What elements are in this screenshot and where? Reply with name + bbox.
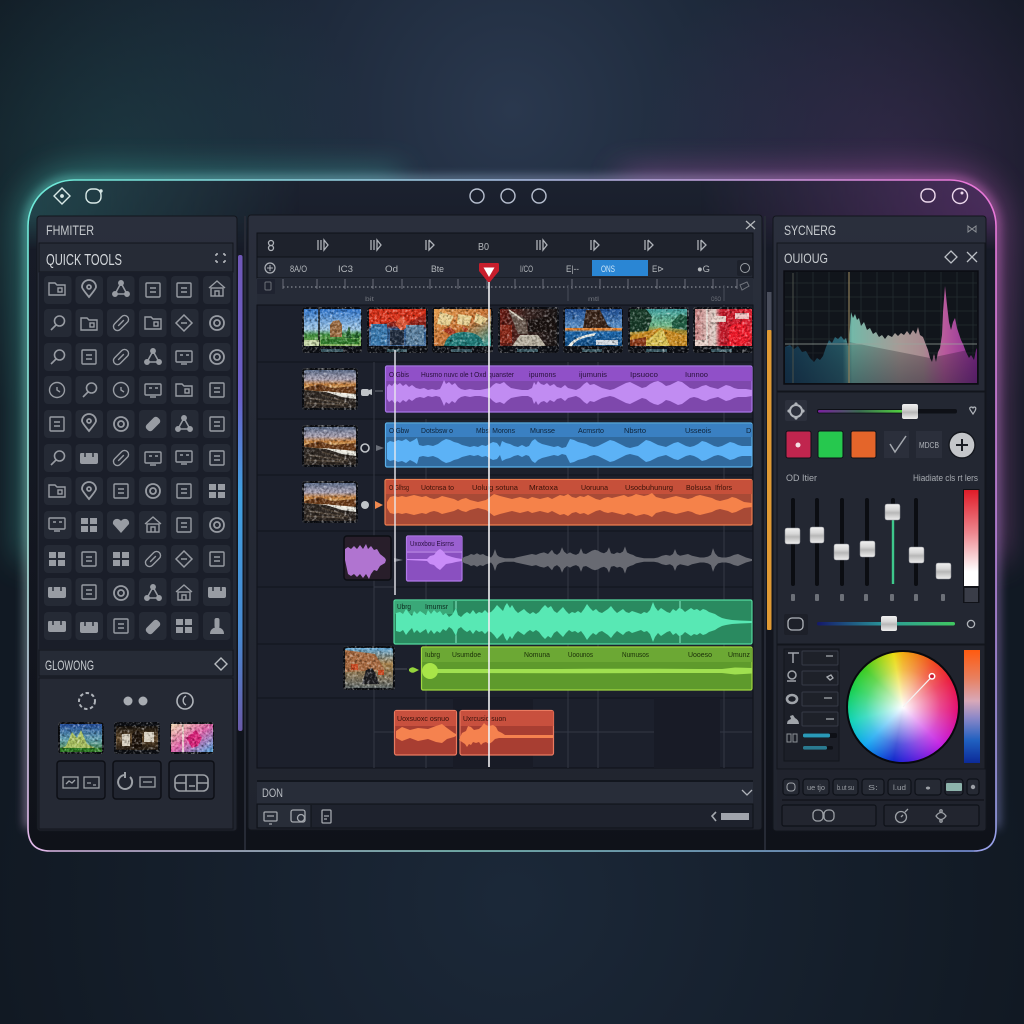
panel: left tools — [37, 216, 237, 831]
quick tools header: QUICK TOOLS — [46, 252, 122, 269]
gray audio waveform — [462, 546, 752, 574]
row 1 thumbnail — [302, 368, 358, 410]
lime audio clip: Usumdoe — [452, 650, 481, 659]
red audio clip one — [394, 710, 456, 755]
blue audio clip: Acmsrto — [578, 426, 604, 435]
colour wheel — [846, 650, 960, 764]
lime audio clip: Umunz — [728, 650, 750, 659]
secondary marker line — [394, 350, 396, 595]
track area — [257, 305, 753, 768]
purple short audio clip — [406, 536, 462, 581]
toggle button row: b.ut su — [837, 785, 854, 792]
controls section — [777, 392, 985, 644]
colour value fields — [784, 649, 839, 761]
transport row — [257, 233, 753, 257]
timecode row: ●G — [697, 264, 710, 275]
preset buttons — [57, 761, 214, 799]
close icon — [746, 221, 755, 229]
green audio clip: Ubrg — [397, 602, 411, 611]
left gradient scrollbar — [238, 255, 242, 731]
timecode row: I/CO — [520, 264, 533, 275]
panel: timeline — [248, 215, 762, 830]
transport row: B0 — [478, 241, 489, 253]
lime audio clip: Uoounos — [568, 650, 593, 659]
green audio clip: Imumsr — [425, 602, 448, 611]
title bar icons — [54, 188, 968, 204]
window frame — [28, 180, 996, 851]
mixer labels — [786, 473, 978, 484]
purple audio clip: Iunnoo — [685, 370, 708, 379]
colour wheel marker — [903, 672, 936, 707]
right panel heading — [784, 222, 976, 238]
orange audio clip: Mratoxa — [529, 483, 559, 492]
colour swatches — [786, 431, 975, 458]
track connector icons — [361, 389, 403, 562]
toggle button row: l.ud — [893, 785, 906, 792]
top slider row — [785, 400, 976, 421]
orange audio clip: Usocbuhunurg — [625, 483, 673, 492]
blue audio clip: Dotsbsw o — [421, 426, 453, 435]
lime audio clip: Iubrg — [425, 650, 440, 659]
glowing section header — [39, 650, 233, 676]
quick tools icon grid — [39, 272, 233, 649]
timecode row: E⊳ — [652, 264, 664, 275]
timecode row: Od — [385, 264, 398, 275]
red audio clip one: Uoxsuoxc osnuo — [397, 714, 449, 723]
colour swatches: MDCB — [919, 440, 939, 450]
purple audio clip: ipumons — [529, 370, 556, 379]
bottom action buttons — [782, 805, 979, 826]
bottom toolbar — [257, 804, 753, 828]
spectrum section: OUIOUG — [784, 250, 828, 266]
toggle button row: ● — [925, 785, 931, 792]
timecode row: 8A/O — [290, 264, 307, 275]
orange audio clip — [385, 480, 752, 525]
timecode row: IC3 — [338, 264, 353, 275]
purple audio clip: O Gbis — [389, 370, 409, 379]
blue audio clip: Nbsrto — [624, 426, 646, 435]
orange audio clip: Uoluig sotuna — [472, 483, 519, 492]
orange audio clip: Bolsusa — [686, 483, 712, 492]
orange audio clip: Uotcnsa to — [421, 483, 454, 492]
glowing section body — [39, 678, 233, 829]
timecode row — [257, 257, 753, 278]
blue audio clip: Mbsl Morons — [476, 426, 515, 435]
purple audio clip — [386, 366, 752, 412]
level meter — [963, 489, 980, 603]
selected time button — [592, 260, 648, 276]
lime audio clip — [422, 647, 752, 690]
toggle button row: S: — [868, 785, 878, 792]
bottom dock header: DON — [262, 786, 283, 800]
quick tools header — [39, 243, 233, 272]
green audio clip — [394, 600, 752, 644]
ruler: OSO — [711, 297, 721, 303]
blue audio clip: Usseois — [685, 426, 711, 435]
lime audio clip: Nomuna — [524, 650, 551, 659]
bottom slider row — [784, 614, 975, 635]
bottom dock header — [257, 781, 753, 804]
spectrum section — [777, 243, 985, 391]
small purple waveform thumbnail — [344, 536, 391, 580]
right vertical scrollbar — [767, 292, 772, 630]
ruler: bit — [365, 297, 374, 303]
orange audio clip: Ifrlors — [715, 483, 732, 492]
row 3 thumbnail — [302, 481, 358, 523]
row 2 thumbnail — [302, 425, 358, 467]
lime audio clip: Uooeso — [688, 650, 712, 659]
colour section — [777, 645, 985, 769]
glowing section header: GLOWONG — [45, 657, 94, 673]
blue audio clip: Munsse — [530, 426, 555, 435]
purple audio clip: Ipsuoco — [630, 370, 658, 379]
video clip thumbnails — [302, 307, 753, 353]
panel: right inspector — [773, 216, 986, 831]
red audio clip two: Uxrcusio suon — [463, 714, 506, 723]
orange audio clip: Uoruuna — [581, 483, 609, 492]
blue audio clip — [386, 423, 752, 467]
ruler: mtl — [588, 297, 599, 303]
purple audio clip: Husmo nuvc ole t Oxd quanster — [421, 370, 514, 379]
mixer labels: Hiadiate cls rt lers — [913, 473, 978, 484]
toggle button row — [777, 770, 985, 830]
preset thumbnails — [58, 722, 214, 754]
left panel heading: FHMITER — [46, 222, 94, 238]
toggle button row: ue tjo — [807, 785, 825, 792]
hue bar — [964, 650, 980, 763]
lime connector — [395, 667, 419, 673]
red audio clip two — [459, 710, 554, 755]
lime audio clip: Numusos — [622, 650, 649, 659]
blue audio clip: O Gbw — [389, 426, 409, 435]
purple audio clip: ijumunis — [579, 370, 607, 379]
playhead — [479, 263, 499, 767]
timecode row: Bte — [431, 264, 444, 275]
mixer faders — [785, 500, 951, 601]
row 6 thumbnail — [343, 646, 395, 690]
blue audio clip: D — [746, 426, 752, 435]
spectrum chart — [784, 271, 978, 384]
orange audio clip: O Glhsg — [389, 483, 409, 492]
ruler — [257, 278, 753, 305]
mixer labels: OD Itier — [786, 473, 817, 484]
purple short audio clip: Uxoxbou Eisrns — [410, 539, 454, 548]
selected time button: ONS — [601, 264, 615, 275]
timecode row: E|-- — [566, 264, 579, 275]
right panel heading: SYCNERG — [784, 222, 836, 238]
